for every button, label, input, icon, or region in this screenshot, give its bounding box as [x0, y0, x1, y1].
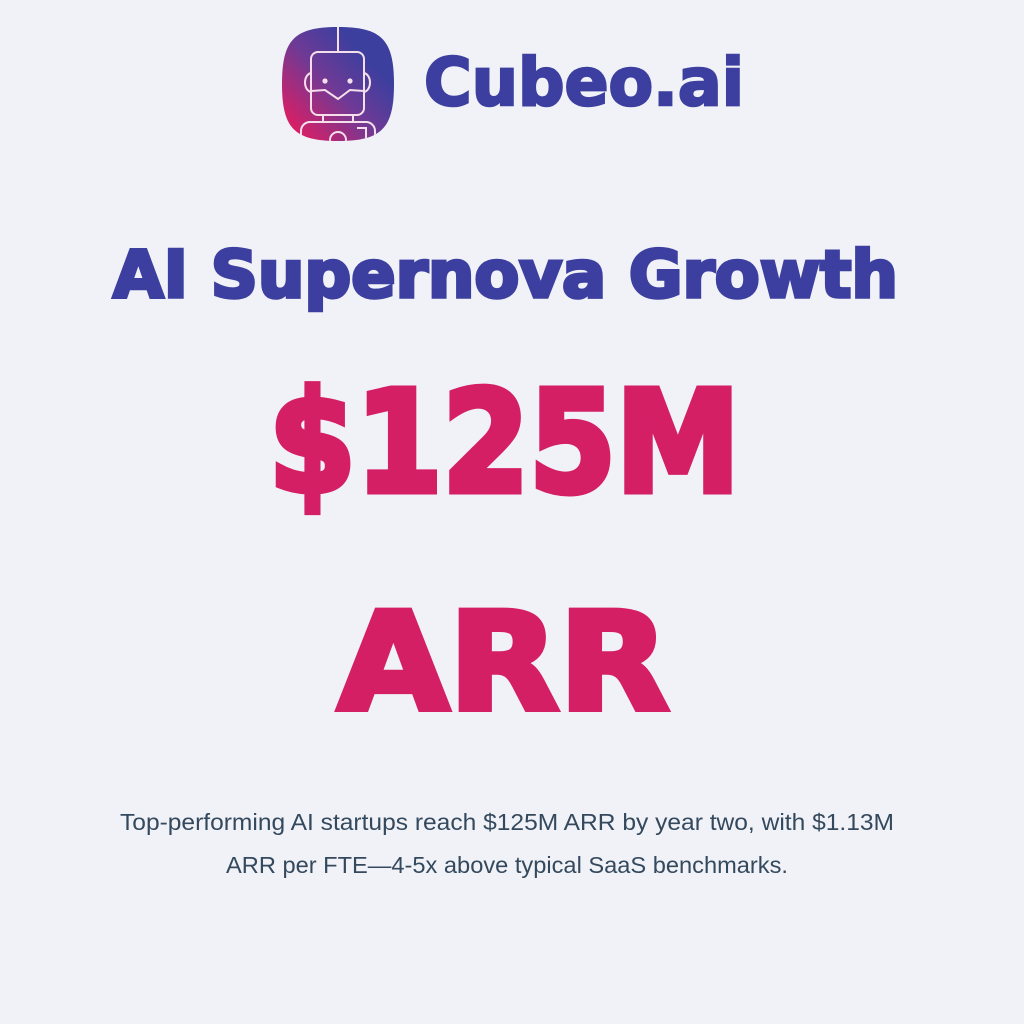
heading: AI Supernova Growth: [113, 238, 898, 313]
big label: ARR: ARR: [338, 584, 669, 741]
logo wordmark: Cubeo.ai: [424, 44, 744, 121]
description text: [120, 809, 894, 878]
description text: ARR per FTE—4-5x above typical SaaS benchmarks.: [226, 852, 788, 878]
icon: robot logo: [282, 27, 394, 141]
big number: $125M: $125M: [269, 362, 740, 525]
description text: Top-performing AI startups reach $125M ARR by year two, with $1.13M: [120, 809, 894, 835]
